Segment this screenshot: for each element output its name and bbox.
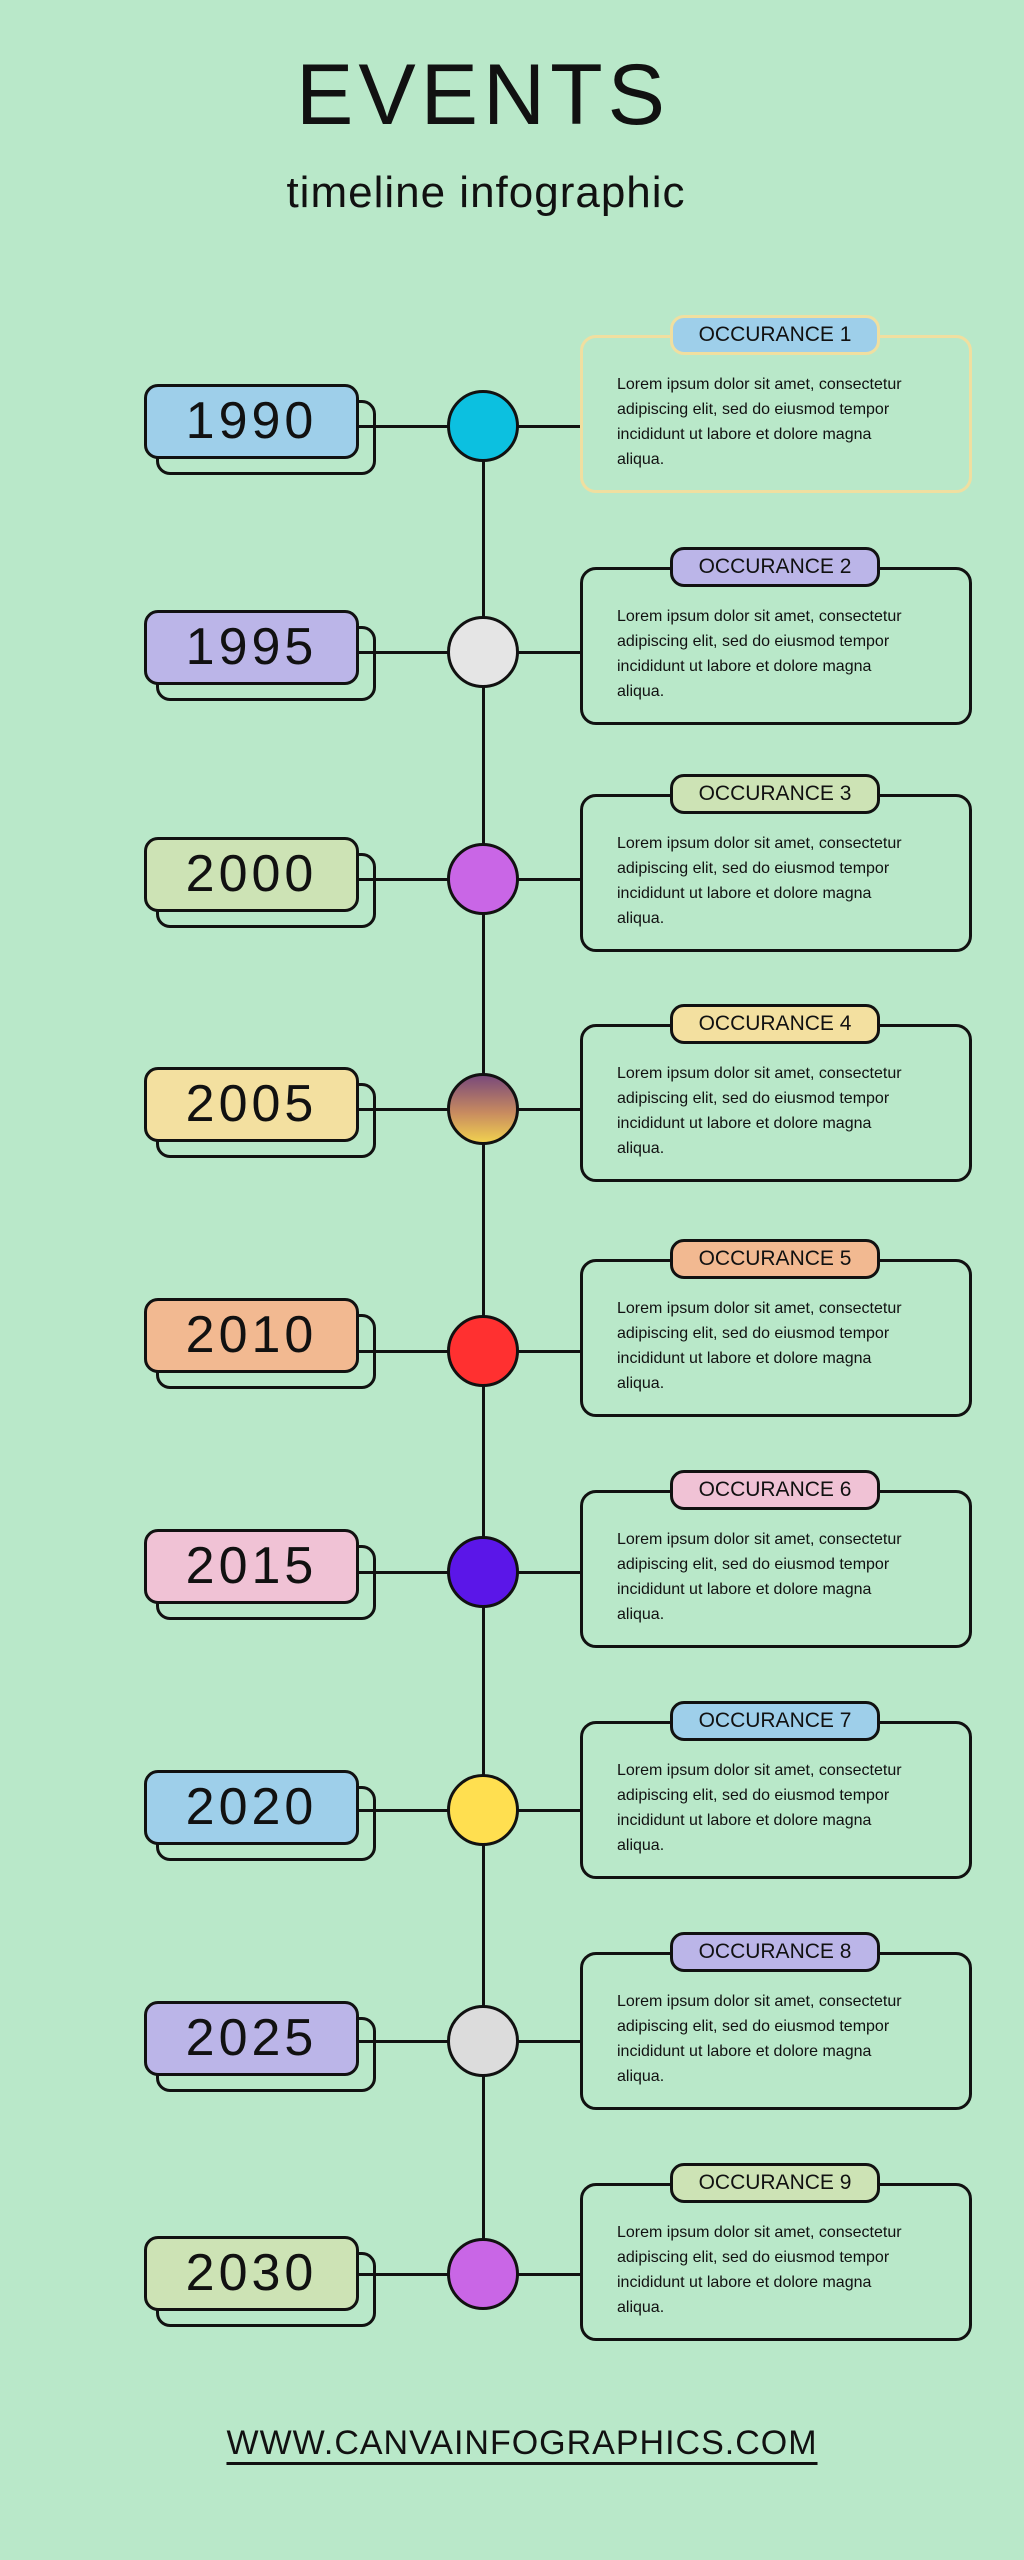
row 2010: 2010 <box>186 1306 317 1364</box>
row 1995: Lorem ipsum dolor sit amet, consectetur adipiscing elit, sed do eiusmod tempor incididunt ut labore et dolore magna aliqua. <box>617 608 902 700</box>
row 1995: 1995 <box>186 618 317 676</box>
row 2020: OCCURANCE 7 <box>699 1709 851 1732</box>
row 1995 <box>144 547 972 725</box>
row 2000: 2000 <box>186 845 317 903</box>
row 2030: OCCURANCE 9 <box>699 2171 851 2194</box>
row 2030 <box>144 2163 972 2341</box>
row 2015: OCCURANCE 6 <box>699 1478 851 1501</box>
row 2030: 2030 <box>186 2244 317 2302</box>
title: EVENTS <box>296 47 670 143</box>
row 2000: Lorem ipsum dolor sit amet, consectetur adipiscing elit, sed do eiusmod tempor incididunt ut labore et dolore magna aliqua. <box>617 835 902 927</box>
row 2005 <box>144 1004 972 1182</box>
row 1990: OCCURANCE 1 <box>699 323 851 346</box>
row 2010 <box>144 1239 972 1417</box>
footer url: WWW.CANVAINFOGRAPHICS.COM <box>226 2424 818 2462</box>
row 2020 <box>144 1701 972 1879</box>
row 2015: 2015 <box>186 1537 317 1595</box>
row 2025: Lorem ipsum dolor sit amet, consectetur adipiscing elit, sed do eiusmod tempor incididunt ut labore et dolore magna aliqua. <box>617 1993 902 2085</box>
row 2005: Lorem ipsum dolor sit amet, consectetur adipiscing elit, sed do eiusmod tempor incididunt ut labore et dolore magna aliqua. <box>617 1065 902 1157</box>
row 1995: OCCURANCE 2 <box>699 555 851 578</box>
row 2015 <box>144 1470 972 1648</box>
timeline vertical line <box>482 426 485 2273</box>
row 2025: 2025 <box>186 2009 317 2067</box>
row 2020: 2020 <box>186 1778 317 1836</box>
row 2005: 2005 <box>186 1075 317 1133</box>
row 2015: Lorem ipsum dolor sit amet, consectetur adipiscing elit, sed do eiusmod tempor incididunt ut labore et dolore magna aliqua. <box>617 1531 902 1623</box>
row 1990 <box>144 315 972 493</box>
row 2010: OCCURANCE 5 <box>699 1247 851 1270</box>
row 2010: Lorem ipsum dolor sit amet, consectetur adipiscing elit, sed do eiusmod tempor incididunt ut labore et dolore magna aliqua. <box>617 1300 902 1392</box>
row 1990: Lorem ipsum dolor sit amet, consectetur adipiscing elit, sed do eiusmod tempor incididunt ut labore et dolore magna aliqua. <box>617 376 902 468</box>
row 2020: Lorem ipsum dolor sit amet, consectetur adipiscing elit, sed do eiusmod tempor incididunt ut labore et dolore magna aliqua. <box>617 1762 902 1854</box>
row 2030: Lorem ipsum dolor sit amet, consectetur adipiscing elit, sed do eiusmod tempor incididunt ut labore et dolore magna aliqua. <box>617 2224 902 2316</box>
row 2025 <box>144 1932 972 2110</box>
row 2025: OCCURANCE 8 <box>699 1940 851 1963</box>
row 2005: OCCURANCE 4 <box>699 1012 851 1035</box>
row 1990: 1990 <box>186 392 317 450</box>
row 2000 <box>144 774 972 952</box>
row 2000: OCCURANCE 3 <box>699 782 851 805</box>
subtitle: timeline infographic <box>286 168 686 217</box>
